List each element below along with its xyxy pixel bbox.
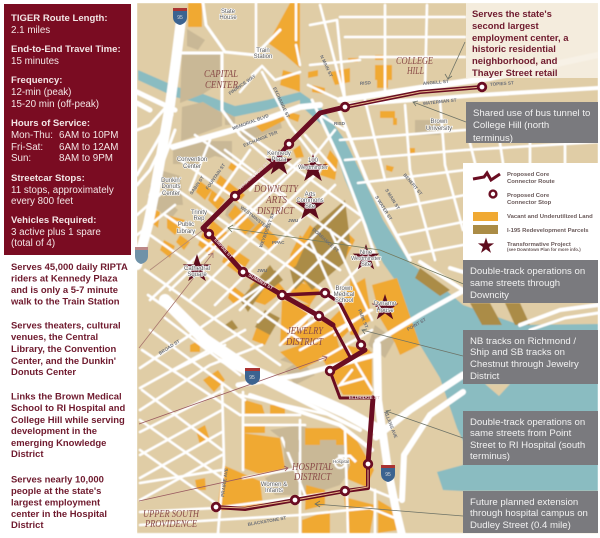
- legend: Vacant and Underutilized Land: [507, 214, 593, 220]
- text block: theaters: Serves theaters, cultural: [11, 320, 121, 332]
- pointer: theaters: [139, 253, 213, 348]
- legend: I-195 Redevelopment Parcels: [507, 228, 589, 234]
- text block: hospital district: center in the Hospital: [11, 509, 107, 520]
- callout: employment center: Thayer Street retail: [472, 68, 558, 79]
- hospital blocks: [285, 440, 340, 477]
- place and street labels: Infants: [265, 488, 283, 494]
- place and street labels: University: [426, 126, 452, 132]
- callout: future extension: [463, 491, 598, 533]
- place and street labels: PARK ST: [357, 309, 369, 329]
- callout: Jewelry District tracks: [463, 330, 598, 384]
- label: College Hill: COLLEGE: [396, 56, 433, 67]
- label: Hospital District: HOSPITAL: [291, 462, 333, 473]
- place and street labels: Train: [256, 48, 270, 54]
- route stops: [205, 83, 486, 511]
- place and street labels: Brown: [335, 286, 353, 292]
- place and street labels: WATERMAN ST: [423, 97, 457, 106]
- text block: theaters: Library, the Convention: [11, 344, 116, 355]
- cream overlay for top callout: [466, 3, 598, 78]
- street map background: [137, 3, 598, 535]
- star: Arts Commons: [296, 192, 324, 219]
- place and street labels: ANGELL ST: [423, 79, 449, 86]
- callout: Point Street tracks: same streets from Point: [470, 428, 572, 439]
- label: Upper South Providence: UPPER SOUTH: [143, 509, 200, 520]
- place and street labels: PRAIRIE AVE: [220, 468, 229, 497]
- text block: Kennedy Plaza: Serves 45,000 daily RIPTA: [11, 262, 128, 273]
- pointer: Dudley Street: [315, 501, 463, 516]
- callout: Point Street tracks: terminus): [470, 451, 510, 462]
- fact: hours of service: Sun:: [11, 153, 31, 164]
- fact: frequency: 12-min (peak): [11, 87, 71, 98]
- pointer: Kennedy Plaza: [150, 193, 237, 270]
- callout: Point Street tracks: Street to RI Hospital (south: [470, 440, 585, 451]
- legend: Transformative Project: [507, 242, 571, 248]
- label: Jewelry District: JEWELRY: [287, 326, 324, 337]
- place and street labels: DORRANCE ST: [311, 227, 340, 253]
- fact: hours of service: Mon-Thu:: [11, 130, 53, 141]
- place and street labels: Station: [254, 54, 272, 60]
- place and street labels: Westminster: [298, 165, 328, 171]
- callout: future extension: Dudley Street (0.4 mile): [470, 520, 571, 531]
- star: 100 Westminster: [299, 154, 327, 181]
- callout: Jewelry District tracks: District: [470, 371, 500, 382]
- place and street labels: Square: [187, 272, 207, 278]
- callout: bus tunnel: College Hill (north: [473, 120, 549, 131]
- star: Dynamo House: [372, 294, 398, 319]
- legend: vacant land: [473, 212, 498, 221]
- shield: I-95 north: 95: [177, 15, 183, 21]
- fact: streetcar stops: [11, 173, 114, 207]
- callout: bus tunnel: terminus): [473, 133, 513, 144]
- place and street labels: Convention: [177, 157, 207, 163]
- downtown and south side streets: [137, 5, 598, 533]
- place and street labels: Trinity: [191, 210, 207, 216]
- place and street labels: Donuts: [161, 184, 181, 190]
- district labels: ARTS: [265, 195, 287, 206]
- pointer: Jewelry District tracks: [362, 329, 463, 356]
- place and street labels: Cathedral: [184, 266, 210, 272]
- fact: vehicles required: 3 active plus 1 spare: [11, 227, 101, 238]
- callout: Downcity tracks: Double-track operations on: [470, 266, 585, 277]
- fact: route length: TIGER Route Length:: [11, 13, 108, 24]
- callout: bus tunnel: Shared use of bus tunnel to: [473, 108, 590, 119]
- place and street labels: BROAD ST: [158, 338, 181, 356]
- district labels: DISTRICT: [285, 337, 324, 348]
- place and street labels: Site: [305, 204, 316, 210]
- legend: Connector Route: [507, 179, 556, 185]
- place and street labels: JWU: [257, 268, 268, 273]
- fact: frequency: [11, 75, 99, 110]
- place and street labels: ALLENS AVE: [383, 411, 398, 439]
- callout: Downcity tracks: same streets through: [470, 278, 560, 289]
- fact: travel time: [11, 44, 121, 67]
- pointer: north side: [445, 42, 465, 79]
- text block: medical school: College Hill while serving: [11, 415, 125, 426]
- fact: travel time: End-to-End Travel Time:: [11, 44, 121, 55]
- fact: hours of service: Hours of Service:: [11, 118, 90, 129]
- legend: route: [473, 173, 500, 180]
- place and street labels: EMPIRE ST: [213, 237, 234, 259]
- callout: employment center: [472, 9, 569, 79]
- place and street labels: Plaza: [271, 157, 287, 163]
- shield: I-95 south: [381, 465, 395, 482]
- text block: medical school: emerging Knowledge: [11, 438, 106, 449]
- place and street labels: S MAIN ST: [384, 188, 401, 210]
- legend: stop: [490, 191, 496, 197]
- place and street labels: Nine: [360, 250, 373, 256]
- text block: Kennedy Plaza: walk to the Train Station: [10, 296, 120, 308]
- text block: hospital district: people at the state's: [11, 486, 101, 497]
- text block: medical school: development in the: [11, 426, 97, 437]
- pointer: hospital: [139, 466, 288, 501]
- building footprints: [150, 29, 440, 495]
- star: Nine Westminster: [353, 244, 379, 269]
- district labels: DISTRICT: [293, 472, 332, 483]
- callout: employment center: neighborhood, and: [472, 56, 558, 67]
- place and street labels: RISD: [360, 80, 372, 86]
- place and street labels: Arts: [305, 192, 315, 198]
- land triangle in bay: [485, 384, 510, 396]
- text block: theaters: venues, the Central: [11, 332, 98, 343]
- text block: medical school: Links the Brown Medical: [11, 392, 122, 402]
- fact: streetcar stops: 11 stops, approximately: [11, 185, 114, 196]
- place and street labels: Center: [162, 191, 180, 197]
- callout: employment center: Serves the state's: [472, 9, 552, 20]
- vacant land parcels: [146, 3, 420, 533]
- fact: frequency: 15-20 min (off-peak): [11, 99, 99, 110]
- callout: Jewelry District tracks: Ship and SB tracks on: [470, 347, 565, 358]
- text block: hospital district: largest employment: [11, 498, 101, 508]
- fact: route length: [11, 13, 108, 36]
- legend: Proposed Core: [507, 193, 550, 199]
- place and street labels: MEMORIAL BLVD: [232, 113, 270, 131]
- place and street labels: SABIN ST: [189, 175, 205, 196]
- place and street labels: EXCHANGE TER: [243, 129, 279, 148]
- place and street labels: BENEFIT ST: [402, 172, 423, 196]
- callout: Downcity tracks: Downcity: [470, 290, 509, 301]
- place and street labels: 100: [308, 158, 319, 164]
- place and street labels: Kennedy: [267, 151, 291, 157]
- text block: hospital district: District: [11, 520, 44, 531]
- fact: vehicles required: [11, 215, 101, 249]
- text block: theaters: [11, 320, 121, 378]
- fact: hours of service: Fri-Sat:: [11, 142, 43, 153]
- fact: streetcar stops: every 800 feet: [11, 196, 73, 207]
- callout: Point Street tracks: Double-track operations on: [470, 417, 585, 428]
- place and street labels: Hospital: [333, 459, 349, 464]
- text block: hospital district: Serves nearly 10,000: [11, 474, 104, 486]
- fact: travel time: 15 minutes: [11, 56, 59, 67]
- text block: theaters: Donuts Center: [11, 367, 76, 378]
- legend: [463, 163, 598, 260]
- place and street labels: N MAIN ST: [319, 54, 334, 78]
- text block: medical school: School to RI Hospital and: [11, 403, 126, 414]
- place and street labels: FINANCE WAY: [228, 74, 257, 96]
- callout: employment center: employment center, a: [472, 33, 569, 44]
- callout: Point Street tracks: [463, 411, 598, 465]
- legend: (see Downtown Plan for more info.): [507, 247, 581, 252]
- legend: Proposed Core: [507, 172, 550, 178]
- district labels: CENTER: [205, 80, 238, 91]
- district labels: HILL: [406, 66, 424, 77]
- fact: route length: 2.1 miles: [11, 25, 50, 36]
- callout: future extension: Future planned extension: [470, 497, 578, 508]
- district labels: DISTRICT: [256, 206, 295, 217]
- fact: vehicles required: (total of 4): [11, 238, 55, 249]
- place and street labels: EXCHANGE ST: [272, 86, 291, 119]
- place and street labels: [158, 9, 514, 527]
- text block: Kennedy Plaza: [10, 262, 128, 308]
- place and street labels: RISD: [334, 121, 346, 126]
- place and street labels: JWU: [288, 218, 299, 223]
- pointer: Point Street: [386, 410, 463, 438]
- place and street labels: WASHINGTON ST: [237, 161, 270, 191]
- place and street labels: Brown: [430, 119, 448, 125]
- callout: Downcity tracks: [463, 260, 598, 303]
- place and street labels: FOUNTAIN ST: [205, 163, 226, 191]
- place and street labels: Library: [177, 229, 195, 235]
- shield: I-95 north: [173, 8, 187, 25]
- star: Cathedral Square: [183, 254, 211, 281]
- callout: future extension: through hospital campus on: [470, 508, 588, 519]
- place and street labels: Women &: [261, 482, 287, 488]
- text block: Kennedy Plaza: riders at Kennedy Plaza: [11, 274, 118, 284]
- callout: employment center: second largest: [472, 21, 539, 32]
- place and street labels: Rep: [193, 216, 205, 222]
- district labels: [143, 56, 433, 530]
- label: Capital Center: CAPITAL: [204, 69, 238, 80]
- pointer: bus tunnel: [413, 101, 466, 122]
- place and street labels: Public: [178, 222, 194, 228]
- callout: employment center: historic residential: [472, 44, 556, 55]
- fact: streetcar stops: Streetcar Stops:: [11, 173, 85, 184]
- shield: I-95 west: [135, 247, 148, 264]
- pointer: Downcity: [228, 225, 466, 285]
- I-195 redevelopment parcels: [225, 200, 530, 335]
- legend: Connector Stop: [507, 200, 552, 206]
- place and street labels: Site: [361, 262, 372, 268]
- fact: frequency: Frequency:: [11, 75, 62, 86]
- place and street labels: House: [376, 308, 394, 314]
- star: Kennedy Plaza: [266, 149, 292, 174]
- transformative project stars: [183, 149, 398, 319]
- callout: Jewelry District tracks: NB tracks on Richmond /: [470, 336, 576, 347]
- fact: hours of service: 8AM to 9PM: [59, 153, 113, 164]
- pointer lines: [139, 42, 466, 516]
- place and street labels: BLACKSTONE ST: [247, 515, 287, 527]
- label: Downcity Arts District: DOWNCITY: [253, 184, 299, 195]
- text block: Kennedy Plaza: and is only a 5-7 minute: [11, 285, 118, 296]
- place and street labels: Dunkin': [161, 178, 181, 184]
- fact: vehicles required: Vehicles Required:: [11, 215, 96, 226]
- place and street labels: Westminster: [351, 256, 381, 262]
- place and street labels: Dynamo: [374, 301, 397, 307]
- panel: route facts: [4, 4, 131, 255]
- place and street labels: WESTMINSTER: [239, 205, 270, 230]
- place and street labels: S WATER ST: [374, 195, 393, 221]
- text block: theaters: Center, and the Dunkin': [11, 356, 116, 367]
- shield: I-95 center: [245, 368, 260, 385]
- place and street labels: PPAC: [272, 240, 285, 245]
- water: river and bay: [138, 70, 598, 491]
- text block: medical school: District: [11, 449, 44, 460]
- district labels: PROVIDENCE: [144, 519, 197, 530]
- place and street labels: Center: [183, 164, 201, 170]
- place and street labels: Medical: [334, 292, 354, 298]
- legend: transformative project: [478, 238, 494, 253]
- legend: redevelopment parcels: [473, 225, 498, 234]
- fact: hours of service: 6AM to 12AM: [59, 142, 118, 153]
- text block: hospital district: [11, 474, 107, 531]
- place and street labels: Commons: [296, 198, 324, 204]
- place and street labels: State: [221, 9, 236, 15]
- place and street labels: School: [335, 298, 353, 304]
- place and street labels: WEYBOSSET ST: [258, 212, 275, 248]
- shield: I-95 south: 95: [385, 472, 391, 478]
- place and street labels: SUMMER ST: [248, 273, 274, 291]
- callout: bus tunnel: [466, 102, 598, 144]
- streetcar route: [203, 87, 482, 509]
- place and street labels: House: [219, 15, 237, 21]
- interstate shields: [135, 8, 395, 482]
- shield: I-95 center: 95: [249, 375, 255, 381]
- place and street labels: POINT ST: [406, 317, 427, 332]
- fact: hours of service: [11, 118, 118, 164]
- place and street labels: TOPIES ST: [490, 80, 514, 87]
- callout: Jewelry District tracks: Chestnut through Jewelry: [470, 359, 579, 370]
- place and street labels: ELDRIDGE ST: [349, 395, 380, 400]
- fact: hours of service: 6AM to 10PM: [59, 130, 118, 141]
- highway network: [137, 3, 598, 535]
- pointer: knowledge district: [139, 356, 327, 424]
- text block: medical school: [11, 392, 126, 460]
